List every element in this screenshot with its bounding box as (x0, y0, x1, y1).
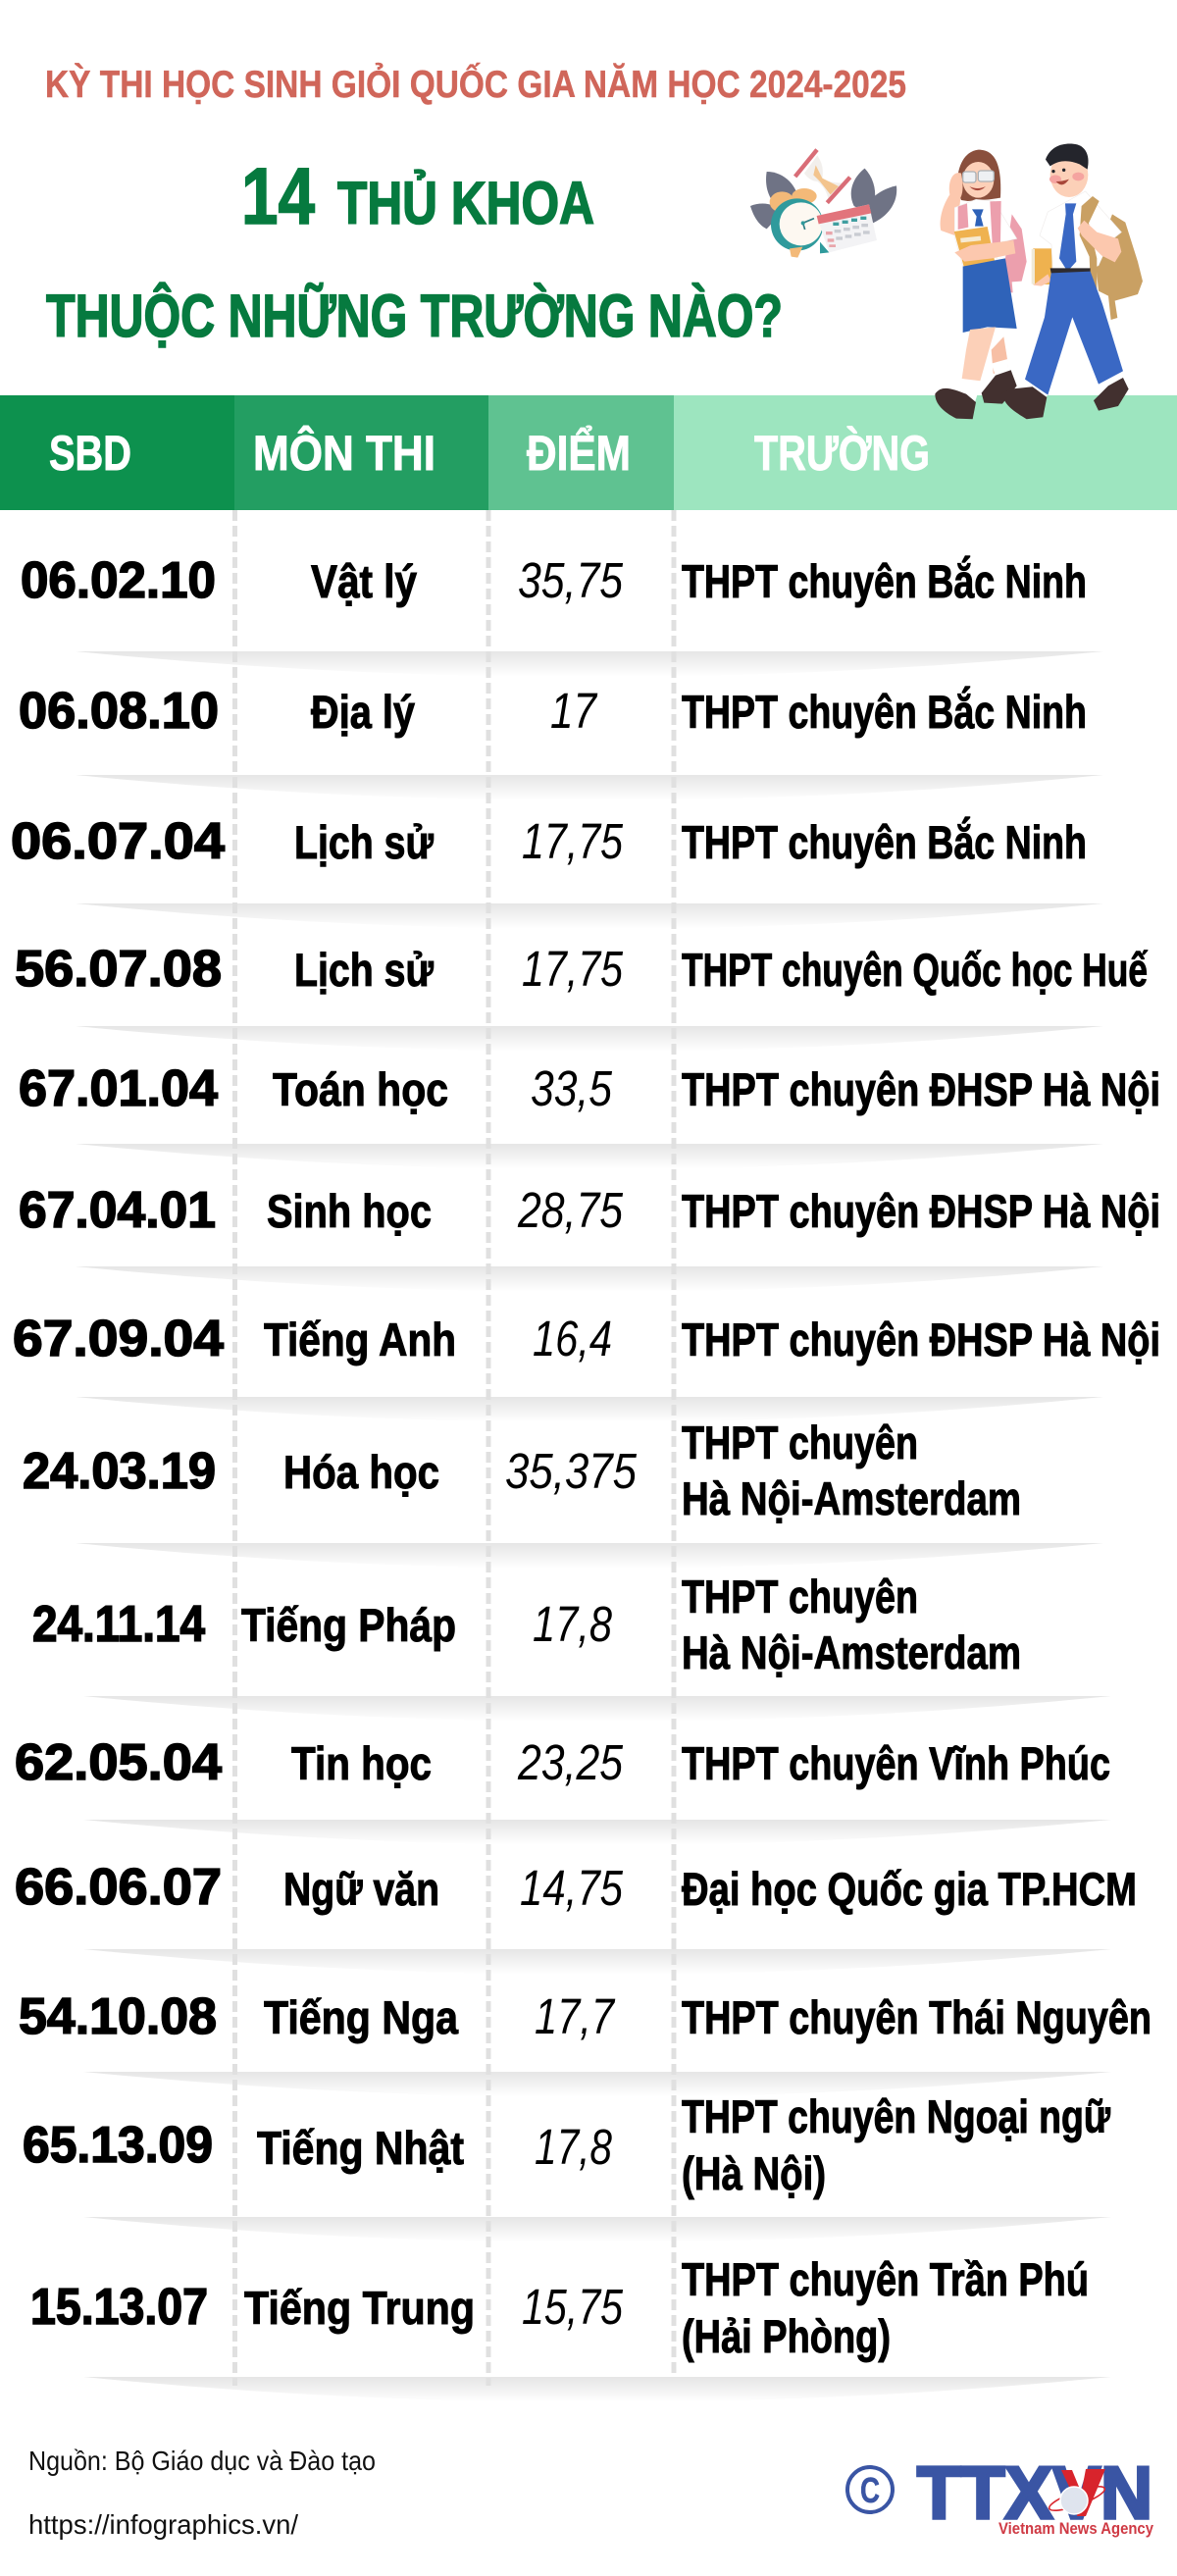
boy student (1002, 144, 1143, 419)
logo: TTXVN Vietnam News Agency: Vietnam News Agency (998, 2519, 1153, 2538)
logo: TTXVN Vietnam News Agency: TTXVN (917, 2451, 1152, 2534)
row 9: 17,8 (533, 1596, 613, 1652)
row 12 (19, 1988, 1151, 2045)
row 3: THPT chuyên Bắc Ninh (682, 816, 1087, 868)
title: exam name: KỲ THI HỌC SINH GIỎI QUỐC GIA NĂM HỌC 2024-2025 (45, 62, 906, 106)
row 6: 67.04.01 (19, 1182, 216, 1239)
row 7: Tiếng Anh (264, 1314, 456, 1365)
table header: ĐIỂM (527, 426, 631, 481)
row 13: (Hà Nội) (682, 2147, 826, 2199)
row 3: 17,75 (522, 813, 624, 869)
row 7: 16,4 (533, 1311, 612, 1366)
row 12: 54.10.08 (19, 1988, 217, 2045)
row 11: Ngữ văn (283, 1863, 439, 1915)
row 14: 15.13.07 (30, 2279, 208, 2336)
logo: TTXVN Vietnam News Agency: C (860, 2470, 880, 2510)
row 13: Tiếng Nhật (257, 2122, 464, 2174)
row 14: Tiếng Trung (244, 2282, 475, 2334)
row 14: 15,75 (522, 2279, 624, 2335)
row 11: 14,75 (520, 1860, 624, 1916)
row 6: 28,75 (517, 1182, 624, 1238)
row 2 (19, 683, 1087, 740)
table header: TRƯỜNG (754, 426, 930, 481)
row 14 (30, 2253, 1089, 2362)
icon: clock, hourglass and calendar (750, 150, 896, 258)
row 10 (15, 1734, 1110, 1791)
row 5: 33,5 (531, 1060, 613, 1116)
row 8: 24.03.19 (23, 1443, 216, 1500)
row 11: 66.06.07 (15, 1859, 222, 1916)
row 1: 35,75 (518, 552, 624, 608)
row 8: Hà Nội-Amsterdam (682, 1472, 1021, 1524)
row 5: Toán học (273, 1063, 448, 1115)
column dashed dividers (235, 510, 674, 2386)
row 2: 06.08.10 (19, 683, 219, 740)
row 9: Hà Nội-Amsterdam (682, 1626, 1021, 1678)
row 11 (15, 1859, 1137, 1916)
row 4 (15, 941, 1149, 998)
heading: 14 thủ khoa: THỦ KHOA (337, 170, 594, 236)
row 1 (21, 552, 1087, 609)
row 4: 56.07.08 (15, 941, 222, 998)
illustration: two students walking (935, 144, 1143, 419)
row 10: 23,25 (517, 1734, 624, 1790)
row 1: 06.02.10 (21, 552, 216, 609)
table header: MÔN THI (253, 425, 435, 481)
table body (11, 510, 1160, 2402)
row 3: 06.07.04 (11, 813, 225, 870)
row 9: Tiếng Pháp (241, 1599, 456, 1651)
row 12: 17,7 (535, 1988, 615, 2044)
row 14: (Hải Phòng) (682, 2310, 891, 2362)
girl student (935, 150, 1027, 419)
row 3: Lịch sử (294, 816, 435, 868)
row 6: Sinh học (267, 1185, 432, 1237)
row 3 (11, 813, 1087, 870)
row 1: Vật lý (311, 555, 417, 607)
table header (0, 395, 1177, 510)
source note: Nguồn: Bộ Giáo dục và Đào tạo (28, 2446, 376, 2476)
row 5 (19, 1060, 1160, 1117)
row 7: 67.09.04 (13, 1311, 224, 1367)
table header: SBD (49, 426, 131, 481)
row 8: Hóa học (283, 1446, 439, 1498)
row 4: 17,75 (522, 941, 624, 997)
row 6 (19, 1182, 1160, 1239)
row 4: Lịch sử (294, 944, 435, 996)
row 8: 35,375 (505, 1443, 638, 1499)
row 12: Tiếng Nga (264, 1991, 459, 2043)
heading: 14 thủ khoa: 14 (241, 152, 315, 241)
row 2: 17 (550, 683, 597, 739)
row 13: 65.13.09 (23, 2117, 213, 2174)
row separators (76, 651, 1111, 2402)
row 10: 62.05.04 (15, 1734, 222, 1791)
row 2: Địa lý (311, 686, 415, 738)
row 10: Tin học (291, 1737, 432, 1789)
row 14: THPT chuyên Trần Phú (682, 2253, 1089, 2305)
heading: thuộc những trường nào: THUỘC NHỮNG TRƯỜNG NÀO? (46, 283, 783, 349)
website url: https://infographics.vn/ (28, 2509, 298, 2540)
row 5: 67.01.04 (19, 1060, 218, 1117)
row 7 (13, 1311, 1160, 1367)
row 1: THPT chuyên Bắc Ninh (682, 555, 1087, 607)
row 9 (32, 1571, 1021, 1678)
row 8: THPT chuyên (682, 1417, 918, 1468)
heading: 14 thủ khoa (241, 152, 594, 241)
row 8 (23, 1417, 1021, 1524)
row 13 (23, 2090, 1111, 2199)
row 13: 17,8 (535, 2119, 613, 2175)
row 9: 24.11.14 (32, 1596, 205, 1653)
row 2: THPT chuyên Bắc Ninh (682, 686, 1087, 738)
row 9: THPT chuyên (682, 1571, 918, 1623)
